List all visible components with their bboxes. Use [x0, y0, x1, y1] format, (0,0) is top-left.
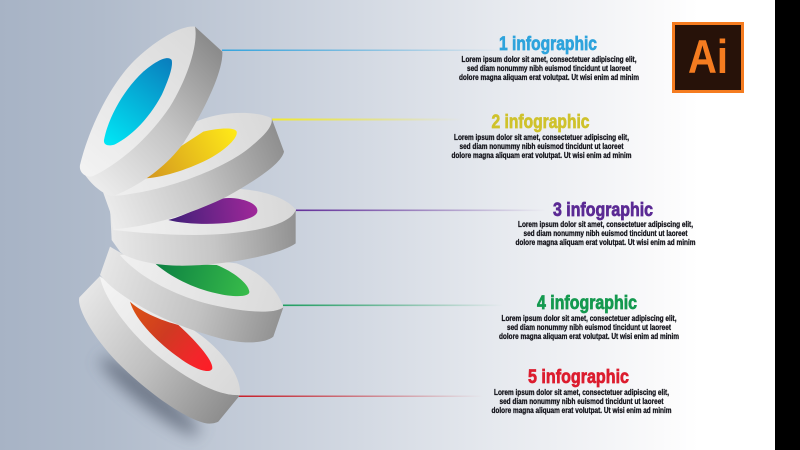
text block 4 — [499, 293, 679, 341]
text block 1: 1 infographic — [499, 34, 597, 55]
text block 5: 5 infographic — [528, 367, 629, 388]
text block 4: 4 infographic — [537, 293, 637, 314]
disc cast shadow — [94, 349, 206, 443]
connector line 4 — [283, 304, 503, 306]
connector line 5 — [238, 396, 483, 397]
text block 1: Lorem ipsum dolor sit amet, consectetuer adipiscing elit, — [462, 54, 636, 64]
text block 4: Lorem ipsum dolor sit amet, consectetuer adipiscing elit, — [502, 313, 676, 323]
text block 3: Lorem ipsum dolor sit amet, consectetuer adipiscing elit, — [518, 219, 693, 229]
text block 2 — [452, 112, 632, 160]
disc 2: yellow — [102, 113, 284, 229]
text block 5 — [492, 367, 672, 415]
disc 3: purple — [110, 188, 296, 266]
text block 5: sed diam nonummy nibh euismod tincidunt ut laoreet — [500, 396, 664, 406]
right black bar — [775, 0, 800, 450]
text block 2: 2 infographic — [492, 112, 590, 133]
text block 4: sed diam nonummy nibh euismod tincidunt ut laoreet — [507, 322, 671, 332]
connector line 1 — [222, 50, 507, 51]
text block 2: Lorem ipsum dolor sit amet, consectetuer adipiscing elit, — [454, 132, 629, 142]
icon: Adobe Illustrator logo — [674, 24, 742, 92]
disc 1: blue — [80, 27, 222, 196]
icon: Adobe Illustrator logo: Ai — [688, 30, 728, 83]
connector line 2 — [272, 118, 462, 120]
text block 3: 3 infographic — [553, 200, 653, 221]
text block 1: dolore magna aliquam erat volutpat. Ut wisi enim ad minim — [459, 72, 639, 82]
connector line 3 — [296, 210, 546, 211]
text block 3: sed diam nonummy nibh euismod tincidunt ut laoreet — [524, 228, 688, 238]
text block 5: dolore magna aliquam erat volutpat. Ut wisi enim ad minim — [492, 405, 672, 415]
disc 4: green — [100, 247, 283, 342]
text block 3 — [516, 200, 696, 247]
text block 1: sed diam nonummy nibh euismod tincidunt ut laoreet — [467, 63, 631, 73]
text block 2: dolore magna aliquam erat volutpat. Ut wisi enim ad minim — [452, 150, 632, 160]
text block 4: dolore magna aliquam erat volutpat. Ut wisi enim ad minim — [499, 331, 679, 341]
text block 5: Lorem ipsum dolor sit amet, consectetuer adipiscing elit, — [494, 387, 669, 397]
text block 3: dolore magna aliquam erat volutpat. Ut wisi enim ad minim — [516, 237, 696, 247]
disc 5: red — [79, 276, 240, 424]
text block 1 — [459, 34, 639, 82]
text block 2: sed diam nonummy nibh euismod tincidunt ut laoreet — [460, 141, 624, 151]
